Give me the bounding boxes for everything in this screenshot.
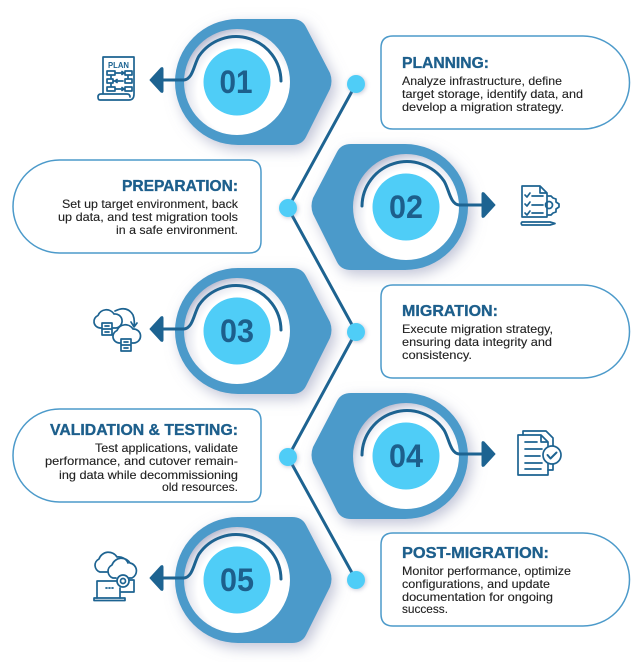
panel: migration: ensuring data integrity and	[402, 335, 552, 349]
panel: planning: Analyze infrastructure, define	[402, 74, 562, 88]
panel: migration: Execute migration strategy,	[402, 322, 553, 336]
panel: validation and testing: VALIDATION & TESTING:	[50, 422, 238, 439]
panel: validation and testing: Test applications, validate	[95, 441, 238, 455]
step 05 badge: 05	[220, 562, 254, 598]
panel: migration: consistency.	[402, 348, 472, 362]
step 03 badge	[150, 268, 332, 394]
icon: cloud laptop with gear	[94, 552, 136, 600]
panel: validation and testing	[13, 409, 261, 502]
icon: checklist with gear	[521, 186, 559, 225]
icon: cloud file transfer	[94, 309, 141, 351]
step 01 badge: 01	[220, 64, 252, 100]
icon: plan document	[98, 57, 134, 100]
panel: preparation	[13, 160, 261, 253]
step 01 badge	[150, 19, 332, 145]
icon: plan document: PLAN	[108, 60, 129, 70]
panel: preparation: in a safe environment.	[116, 223, 238, 237]
panel: preparation: up data, and test migration tools	[58, 210, 238, 224]
panel: planning: PLANNING:	[402, 55, 489, 72]
panel: validation and testing: old resources.	[162, 480, 238, 494]
step 04 badge: 04	[389, 438, 423, 474]
panel: post-migration	[381, 533, 630, 626]
panel: planning: develop a migration strategy.	[402, 100, 564, 114]
step 04 badge	[312, 393, 495, 519]
panel: post-migration: configurations, and update	[402, 577, 550, 591]
panel: preparation: Set up target environment, back	[62, 197, 239, 211]
icon: document with check badge	[518, 431, 561, 475]
panel: post-migration: documentation for ongoing	[402, 590, 553, 604]
panel: migration	[381, 285, 630, 378]
connector zigzag line	[288, 84, 356, 580]
connector dots	[279, 75, 365, 589]
panel: planning	[381, 36, 630, 129]
panel: migration: MIGRATION:	[402, 303, 498, 320]
step 02 badge: 02	[389, 189, 423, 225]
panel: post-migration: POST-MIGRATION:	[402, 545, 549, 562]
panel: preparation: PREPARATION:	[122, 178, 238, 195]
panel: validation and testing: ing data while decommissioning	[59, 468, 238, 482]
panel: post-migration: Monitor performance, optimize	[402, 564, 571, 578]
panel: post-migration: success.	[402, 602, 448, 616]
panel: planning: target storage, identify data, and	[402, 87, 583, 101]
step 05 badge	[150, 517, 332, 643]
panel: validation and testing: performance, and cutover remain-	[45, 454, 238, 468]
step 02 badge	[312, 144, 495, 270]
step 03 badge: 03	[220, 313, 254, 349]
